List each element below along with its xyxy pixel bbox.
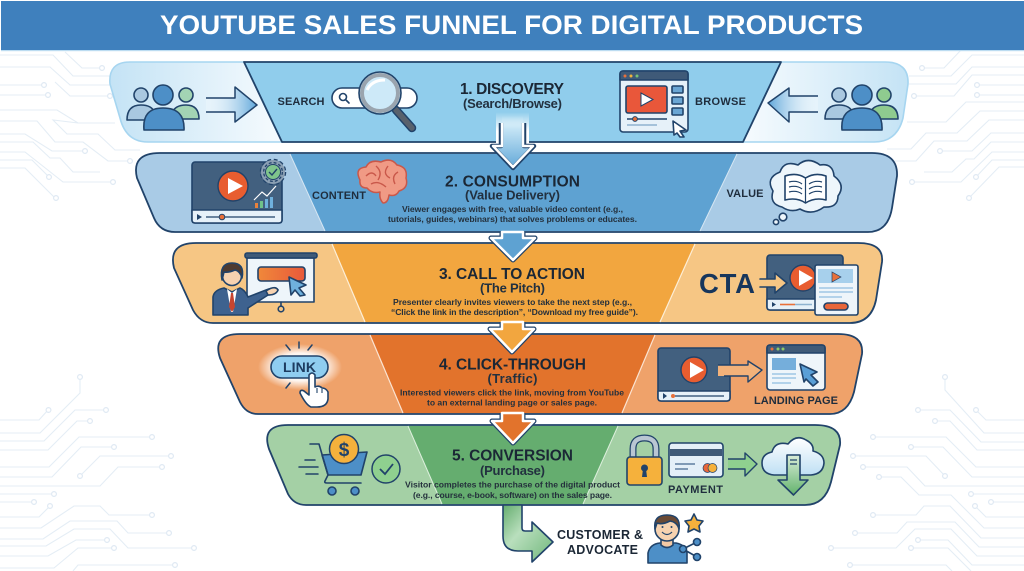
arrow: right audience to browse [768, 88, 818, 122]
title banner [1, 1, 1024, 51]
centre band [290, 154, 737, 231]
icon: credit card [669, 443, 723, 477]
icon: brain [358, 160, 407, 203]
arrow: discovery to consumption [492, 112, 534, 168]
side band [218, 334, 862, 414]
description: Interested viewers click the link, moving from YouTube [400, 388, 624, 398]
side band [267, 425, 840, 505]
title text: YOUTUBE SALES FUNNEL FOR DIGITAL PRODUCTS [160, 10, 863, 40]
value label: VALUE [726, 188, 764, 200]
subheading: (Value Delivery) [465, 188, 560, 202]
icon: happy customer with star and share [648, 514, 703, 563]
customer and advocate label [557, 528, 643, 557]
panel: 4 click-through [218, 334, 862, 414]
centre band [370, 335, 655, 413]
icon: browser video window [620, 71, 688, 137]
side band [173, 243, 882, 323]
customer and advocate label: ADVOCATE [567, 543, 638, 557]
arrow: consumption to call to action [491, 232, 535, 260]
icon: cart with coin and check [299, 434, 400, 495]
customer and advocate label: CUSTOMER & [557, 528, 643, 542]
heading: 2. CONSUMPTION [445, 174, 580, 190]
icon: presenter at board [213, 253, 317, 315]
panel: 3 call to action: “Click the link in the description”, “Download my free guide”). [391, 307, 638, 317]
panel: 2 consumption: tutorials, guides, webinars) that solves problems or educates. [388, 214, 637, 224]
icon: left audience [127, 85, 199, 130]
arrow: conversion to customer [503, 505, 553, 562]
heading: 4. CLICK-THROUGH [439, 356, 586, 374]
arrow: left audience to search [206, 87, 257, 122]
icon: search bar with magnifier [332, 72, 417, 128]
icon: video player with gear [192, 161, 284, 223]
icon: cta video and page [760, 255, 858, 315]
centre band [408, 426, 618, 504]
icon: link button with hand: LINK [283, 359, 316, 375]
panel: 2 consumption [136, 153, 897, 232]
panel: 3 call to action [173, 243, 882, 323]
panel: 1 discovery [110, 62, 908, 142]
icon: video to landing page [658, 345, 825, 401]
left audience panel [110, 62, 282, 142]
icon: right audience [825, 85, 898, 130]
arrow: click-through to conversion [492, 413, 534, 443]
side band [136, 153, 897, 232]
icon: cart with coin and check: $ [339, 440, 350, 461]
discovery trapezoid [244, 62, 781, 142]
landing page label: LANDING PAGE [754, 395, 838, 407]
heading: 1. DISCOVERY [460, 81, 565, 98]
heading: 3. CALL TO ACTION [439, 266, 585, 283]
description: Visitor completes the purchase of the digital product [405, 480, 620, 490]
arrow: call to action to click-through [490, 322, 534, 352]
arrow: payment to download [728, 453, 757, 476]
panel: 4 click-through: to an external landing page or sales page. [427, 398, 597, 408]
subheading: (The Pitch) [480, 280, 545, 296]
browse label: BROWSE [695, 96, 746, 108]
centre band [332, 244, 695, 322]
icon: cloud download [762, 438, 824, 495]
subheading: (Traffic) [488, 371, 538, 386]
description: Presenter clearly invites viewers to take the next step (e.g., [393, 297, 632, 307]
panel: 5 conversion: (e.g., course, e-book, software) on the sales page. [413, 490, 612, 500]
subheading: (Search/Browse) [463, 96, 562, 111]
panel: 5 conversion [267, 425, 840, 505]
heading: 5. CONVERSION [452, 448, 573, 464]
search label: SEARCH [278, 96, 325, 108]
icon: link button with hand [258, 342, 342, 407]
cta label: CTA [699, 268, 755, 299]
right audience panel [743, 62, 908, 142]
payment label: PAYMENT [668, 484, 723, 496]
content label: CONTENT [312, 190, 366, 202]
icon: thought cloud with book [770, 160, 841, 225]
icon: padlock [627, 438, 662, 485]
description: Viewer engages with free, valuable video content (e.g., [402, 204, 623, 214]
subheading: (Purchase) [480, 463, 545, 478]
